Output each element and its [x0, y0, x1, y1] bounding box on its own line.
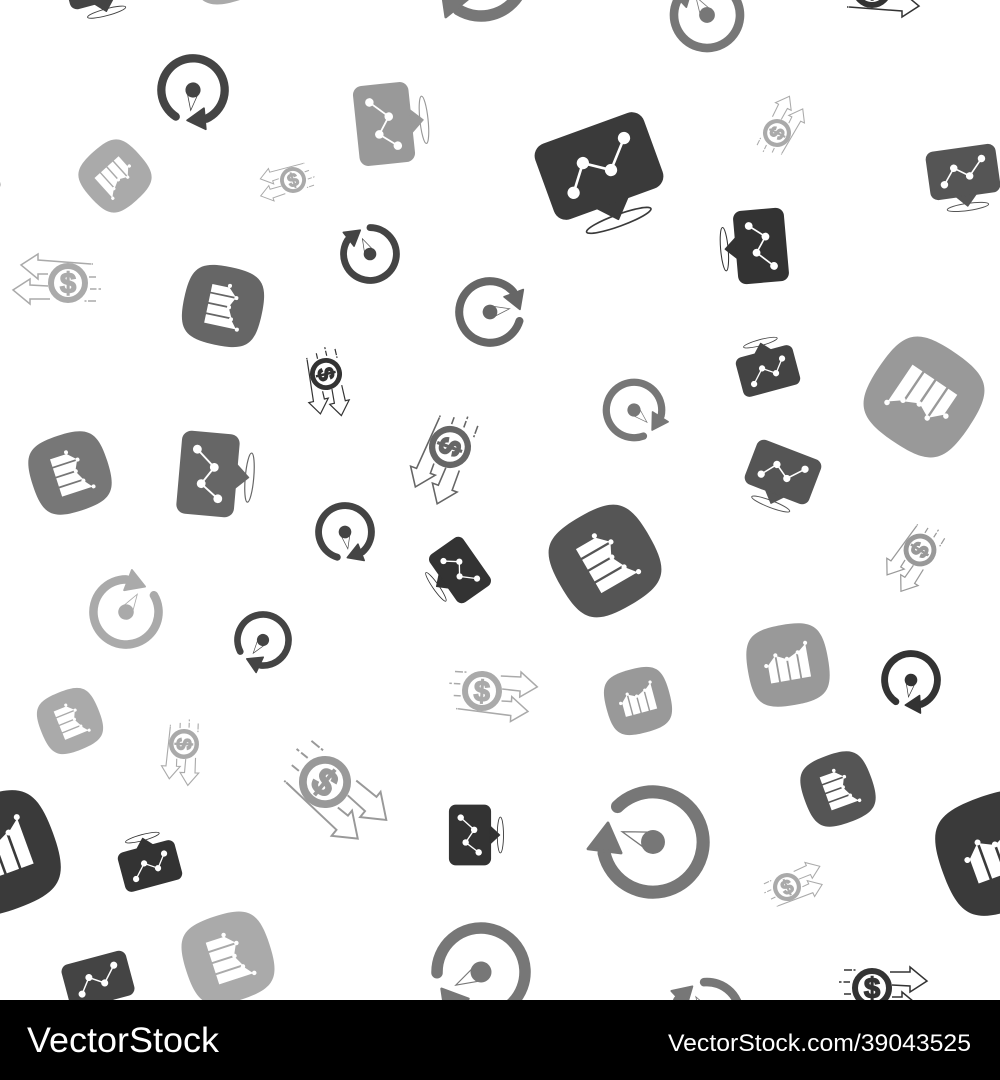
icon: squircle bar chart light left [30, 681, 110, 761]
icon: reload bottom [410, 910, 543, 1044]
icon: reload top right [653, 0, 753, 62]
icon: squircle bar chart bottom [173, 903, 283, 1013]
icon: dollar coin arrows centre [448, 668, 538, 723]
icon: squircle bar chart mid left [21, 424, 119, 522]
icon: squircle bar chart lower right [793, 744, 883, 834]
icon: dollar coin arrows small down: $ [171, 738, 197, 750]
watermark band [0, 1000, 1000, 1080]
icon: squircle bar chart dark right edge [923, 778, 1000, 928]
icon: reload top wrap [410, 0, 543, 44]
icon: dollar coin arrows centre: $ [473, 676, 491, 708]
icon: speech chart pin left edge wrap [0, 143, 3, 215]
icon: dollar coin arrows bottom right [839, 967, 927, 1017]
icon: dollar coin arrows right side [876, 514, 949, 597]
icon: speech chart pin left column [176, 430, 257, 519]
icon: dollar coin arrows up [754, 92, 812, 163]
wordmark: VectorStock [27, 1021, 220, 1060]
icon: reload upper centre [327, 211, 407, 291]
icon: dollar coin arrows small down [161, 719, 201, 786]
icon: speech chart pin lower left [113, 827, 184, 893]
icon: dollar coin arrows top wrap [839, 0, 927, 17]
icon: speech chart pin top centre [352, 79, 432, 167]
icon: reload light left [87, 563, 168, 651]
icon: speech chart pin pointing up [731, 332, 802, 398]
icon: dollar coin arrows small left [253, 155, 318, 205]
icon: dollar coin arrows left [13, 254, 101, 304]
icon: squircle bar chart top wrap [173, 0, 283, 13]
icon: dollar coin arrows right side: $ [904, 537, 934, 562]
icon: dollar coin arrows up: $ [766, 124, 790, 143]
icon: squircle bar chart large centre [536, 492, 674, 630]
icon: reload large [588, 792, 703, 892]
icon: speech chart pin pointing left [717, 207, 790, 286]
icon: dollar coin arrows left: $ [60, 268, 76, 300]
icon: squircle bar chart dark left edge [0, 778, 73, 928]
icon: reload bottom right wrap [653, 962, 753, 1062]
icon: speech chart pin top wrap [60, 0, 140, 24]
icon: squircle bar chart large right [849, 322, 999, 472]
icon: speech chart pin bottom centre [449, 805, 503, 865]
image id: VectorStock.com/39043525 [668, 1030, 971, 1057]
icon: reload centre [448, 266, 540, 354]
icon: large speech chart pin [531, 109, 675, 246]
icon: reload mid [309, 496, 384, 575]
icon: dollar coin arrows down left: $ [431, 433, 468, 461]
icon: speech chart pin bottom left [60, 949, 140, 1024]
icon: dollar coin arrows down left [402, 404, 483, 509]
icon: reload right [880, 649, 943, 718]
icon: reload mid right [597, 373, 678, 450]
icon: speech chart pin right edge [925, 143, 1000, 215]
icon: speech chart pin lower left ring [417, 534, 494, 613]
icon: reload upper left [155, 52, 233, 137]
icon: squircle bar chart upright [741, 618, 835, 712]
icon: dollar coin arrows lower right: $ [778, 876, 797, 900]
icon: speech chart pin tilted [737, 437, 824, 520]
icon: dollar coin arrows large [268, 734, 398, 856]
icon: dollar coin arrows down dark [297, 344, 352, 422]
icon: dollar coin arrows bottom right: $ [864, 973, 880, 1005]
icon: dollar coin arrows lower right [760, 857, 830, 915]
icon: dollar coin arrows small left: $ [285, 168, 302, 192]
icon: squircle bar chart dark left [176, 259, 270, 353]
icon: squircle bar chart upper left [69, 130, 161, 222]
icon: squircle bar chart small upright [598, 661, 678, 741]
icon: dollar coin arrows down dark: $ [312, 365, 340, 383]
icon: reload dark left [229, 608, 295, 679]
icon: dollar coin arrows large: $ [304, 759, 346, 805]
